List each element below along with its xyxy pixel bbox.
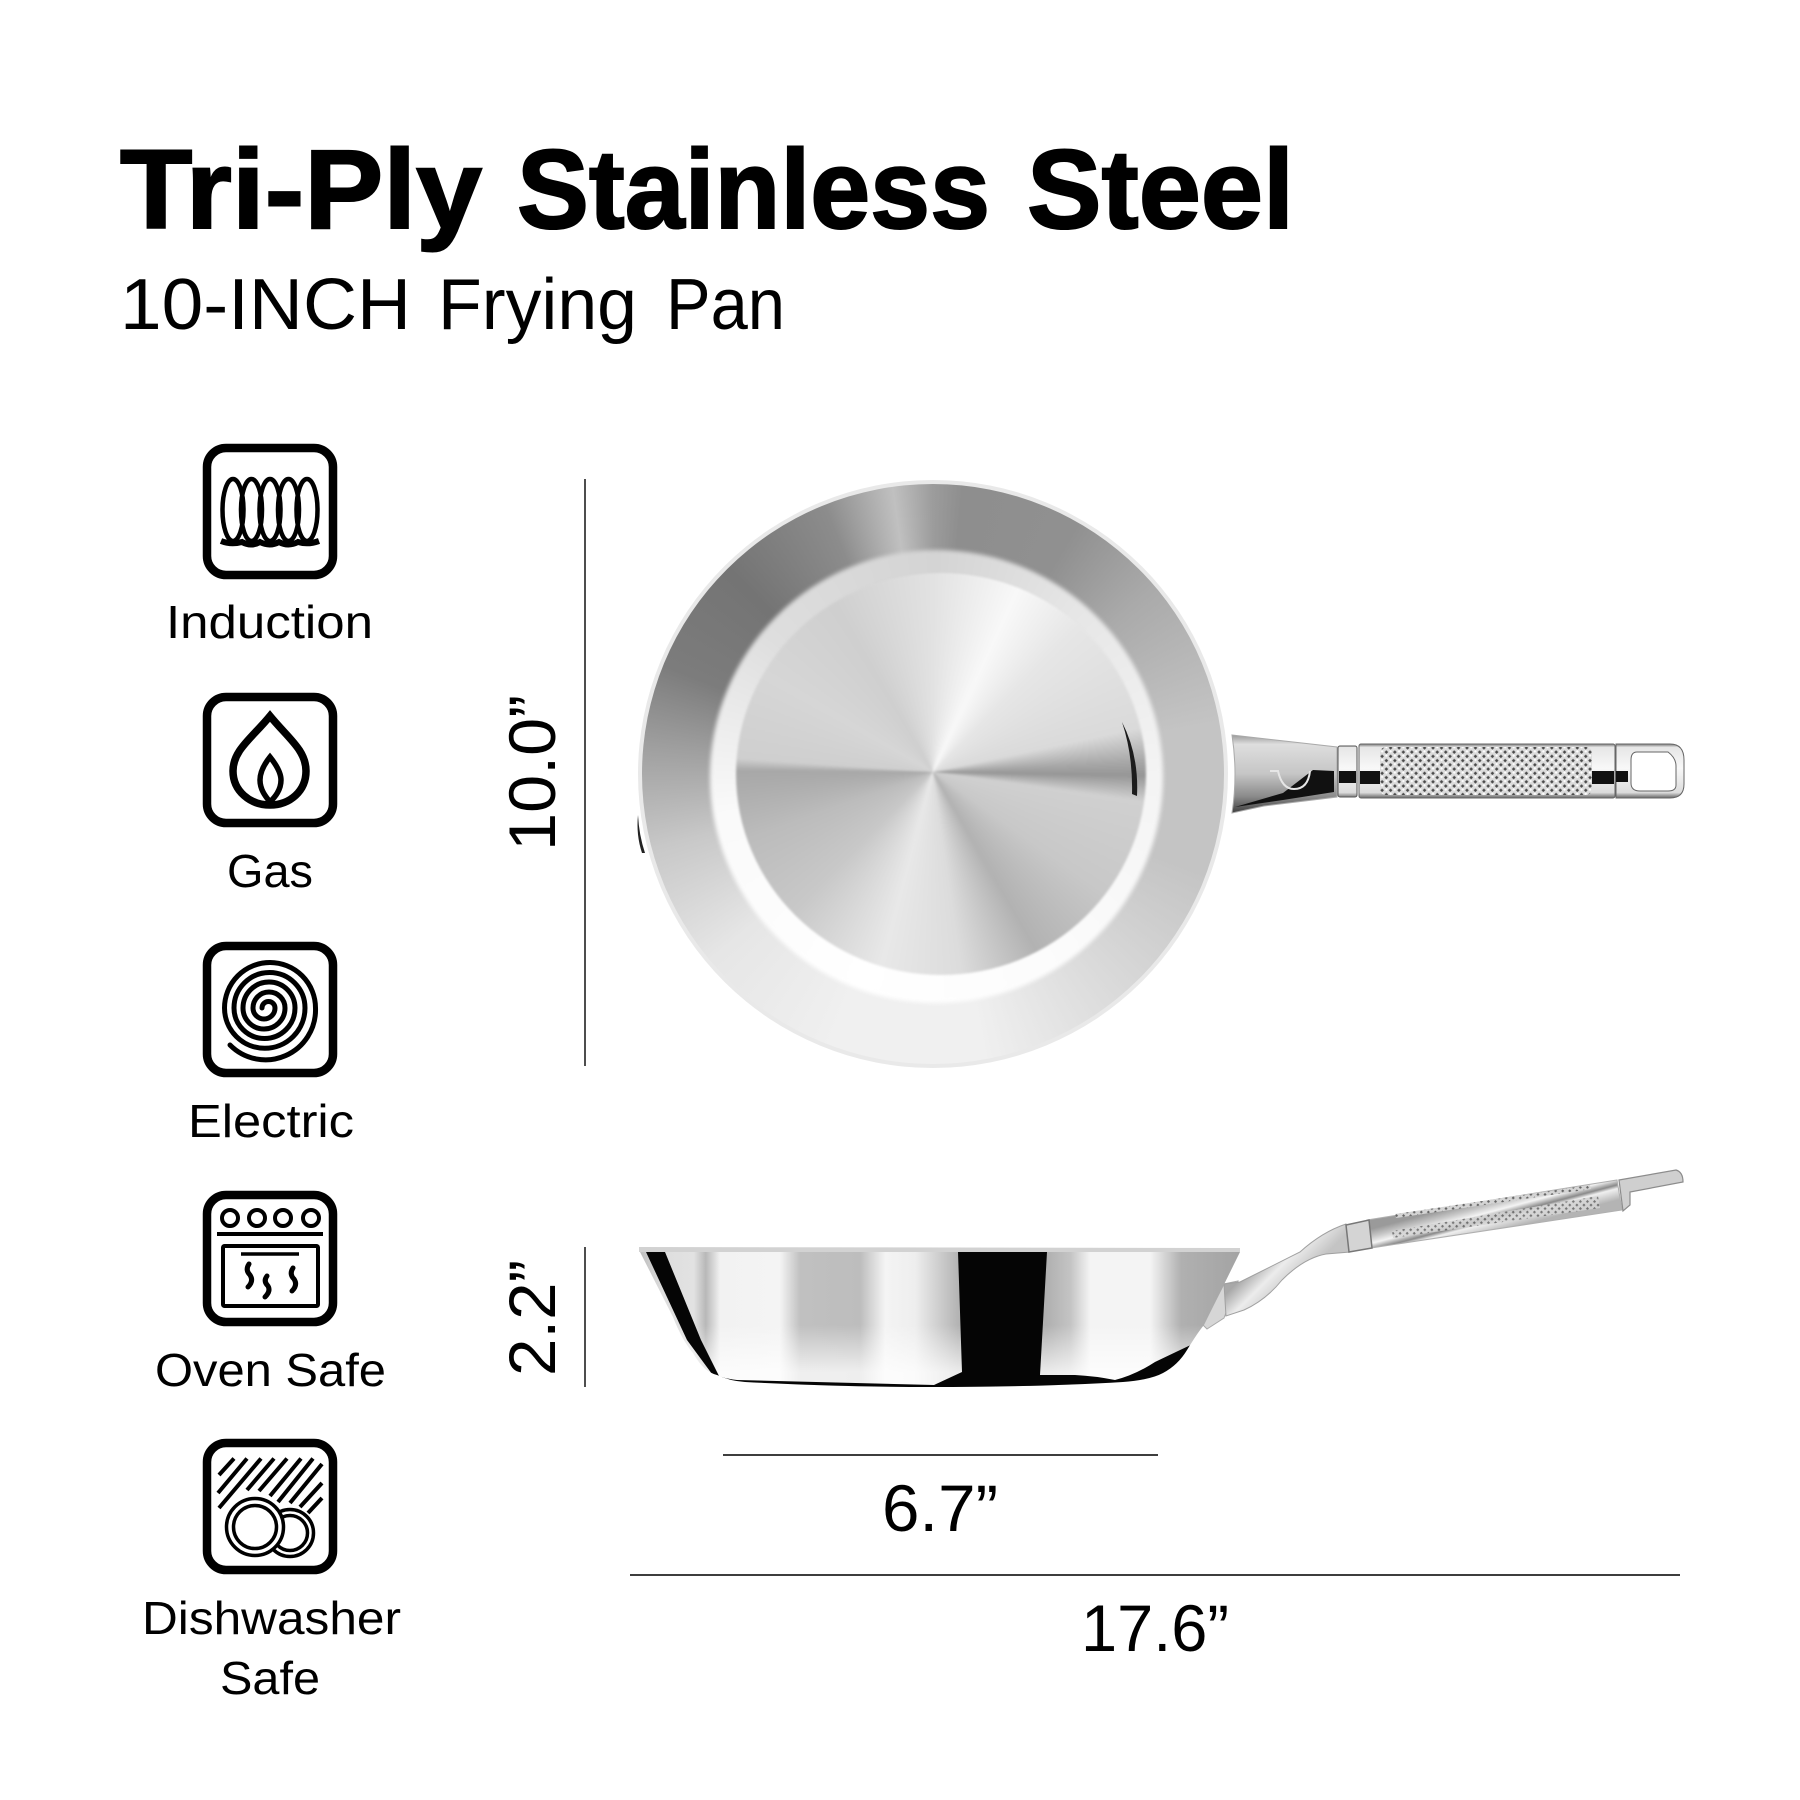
neck dark reflection	[1235, 770, 1334, 807]
subtitle: 10-INCH	[120, 265, 411, 345]
black reflection band	[721, 1252, 1190, 1387]
upper knurl strip	[1395, 1185, 1591, 1218]
dimension: 10.0 inch: 10.0”	[495, 695, 569, 851]
knurled grip texture	[1380, 747, 1592, 795]
title: Steel	[1027, 127, 1294, 252]
dimension: 2.2 inch: 2.2”	[495, 1260, 569, 1376]
neck logo mark	[1270, 771, 1310, 789]
label: gas: Gas	[227, 845, 313, 897]
pan wall	[638, 480, 1228, 1068]
pan rim band	[710, 550, 1163, 1003]
icon: dishwasher safe	[207, 1443, 333, 1570]
handle grip	[1359, 744, 1615, 798]
handle bracket	[1203, 1281, 1238, 1329]
pan body	[640, 1252, 1240, 1387]
pan side view	[630, 1170, 1683, 1395]
dimension line: pan diameter	[584, 479, 586, 1066]
icon: induction	[207, 448, 333, 575]
label: electric: Electric	[188, 1095, 354, 1147]
dimension: 17.6 inch: 17.6”	[1081, 1591, 1229, 1665]
handle top view	[1232, 735, 1684, 813]
dimension line: pan height	[584, 1247, 586, 1387]
subtitle: Pan	[666, 265, 785, 345]
side handle	[1203, 1170, 1683, 1329]
handle neck	[1232, 735, 1337, 813]
handle collar	[1346, 1220, 1372, 1252]
handle collar	[1338, 746, 1357, 797]
label: dishwasher safe: Safe	[220, 1652, 320, 1704]
title	[120, 127, 1294, 252]
lower knurl strip	[1392, 1196, 1600, 1238]
handle end loop	[1616, 744, 1684, 798]
icon: gas	[207, 697, 333, 823]
label: induction: Induction	[166, 596, 373, 648]
left reflection strip	[646, 1252, 720, 1378]
dimension line: base diameter	[723, 1454, 1158, 1456]
subtitle: Frying	[438, 265, 637, 345]
icon: electric	[207, 946, 333, 1073]
floor edge shadow	[1122, 722, 1137, 796]
label: dishwasher safe	[142, 1592, 401, 1704]
subtitle	[120, 265, 785, 345]
dimension line: overall length	[630, 1574, 1680, 1576]
pan top view	[638, 480, 1684, 1068]
icon: oven safe	[207, 1195, 333, 1322]
dimension: 6.7 inch: 6.7”	[882, 1471, 998, 1545]
title: Stainless	[517, 127, 990, 252]
label: dishwasher safe: Dishwasher	[142, 1592, 401, 1644]
pan floor with brushed radial finish	[736, 573, 1146, 975]
handle neck	[1224, 1224, 1350, 1316]
handle tip	[1619, 1170, 1683, 1211]
pan rim	[639, 1247, 1240, 1252]
label: oven safe: Oven Safe	[155, 1344, 386, 1396]
lower left dark rim	[638, 815, 645, 853]
title: Tri-Ply	[120, 127, 482, 252]
handle grip	[1367, 1180, 1622, 1248]
